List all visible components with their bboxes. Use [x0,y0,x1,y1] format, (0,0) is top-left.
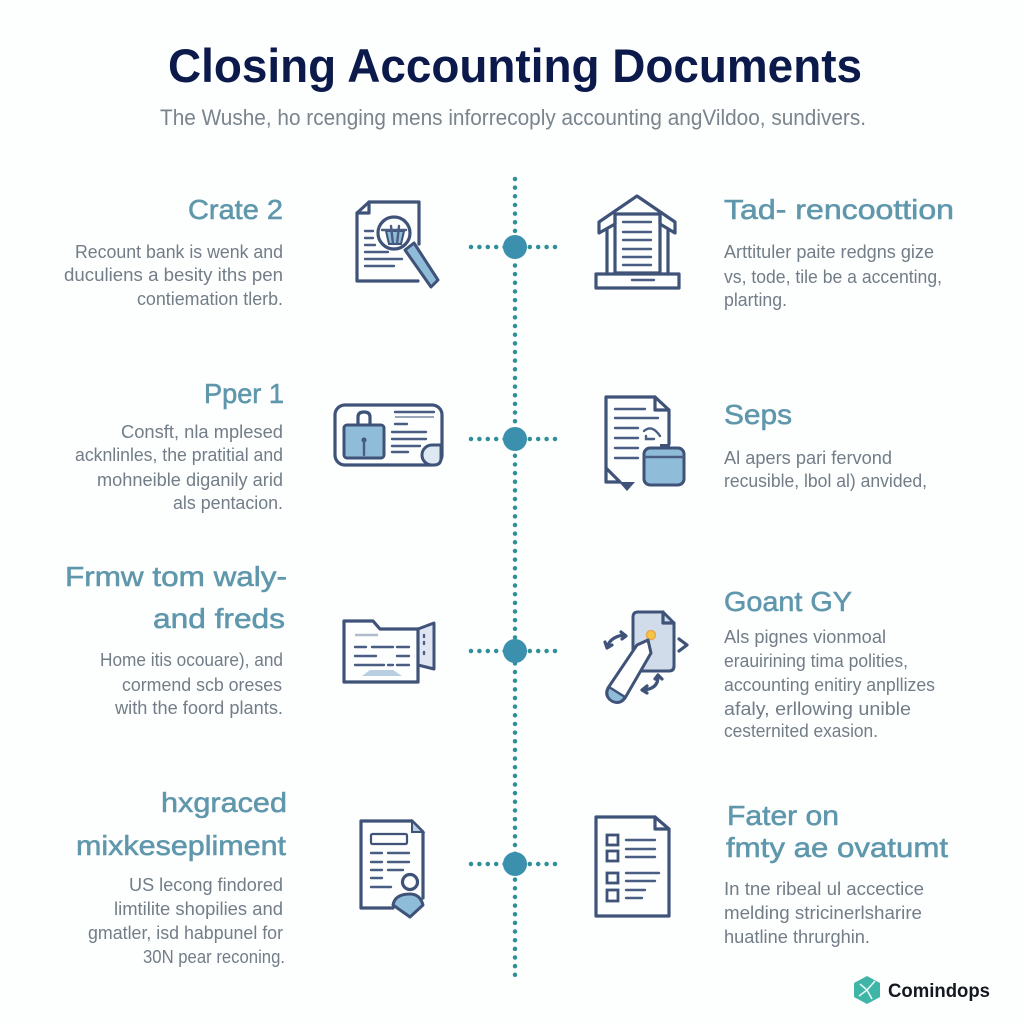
panel: left step 2: Consft, nla mplesed [121,422,283,442]
panel: right step 1: vs, tode, tile be a accenting, [724,267,942,287]
panel: left step 3: and freds [153,603,285,634]
panel: left step 4: 30N pear reconing. [143,947,285,967]
panel: left step 3 [65,561,287,718]
panel: right step 1: Tad- rencoottion [724,194,954,225]
panel: right step 3: erauirining tima polities, [724,651,908,671]
panel: left step 1: contiemation tlerb. [137,289,283,309]
logo [854,976,990,1004]
panel: right step 4: melding stricinerlsharire [724,903,922,923]
panel: right step 4 [724,800,948,947]
panel: left step 4: limtilite shopilies and [114,899,283,919]
panel: left step 2 [75,378,284,513]
icon: id card with lock [335,405,442,465]
panel: left step 4 [76,787,287,967]
title: Closing Accounting Documents [168,39,862,92]
panel: right step 3: cesternited exasion. [724,721,878,741]
timeline [471,179,556,976]
panel: right step 2: recusible, lbol al) anvided, [724,471,927,491]
subtitle: The Wushe, ho rcenging mens inforrecoply accounting angVildoo, sundivers. [160,105,866,130]
icon: document with bag [606,397,684,491]
panel: left step 3: Home itis ocouare), and [100,650,283,670]
panel: right step 3: Goant GY [724,586,852,617]
panel: left step 2: acknlinles, the pratitial and [75,445,283,465]
panel: left step 1 [64,194,283,309]
logo: Comindops [888,981,990,1002]
panel: left step 1: Recount bank is wenk and [75,242,283,262]
panel: left step 2: Pper 1 [204,378,284,409]
panel: left step 3: Frmw tom waly- [65,561,287,592]
panel: right step 2: Seps [724,399,792,430]
icon: checklist document [596,817,669,916]
panel: right step 4: huatline thrurghin. [724,927,870,947]
panel: left step 3: cormend scb oreses [122,675,282,695]
panel: right step 4: Fater on [727,800,839,831]
icon: document with magnifier [357,202,438,287]
panel: right step 3: Als pignes vionmoal [724,627,886,647]
panel: left step 1: duculiens a besity iths pen [64,265,283,285]
panel: left step 2: als pentacion. [173,493,283,513]
panel: right step 1: Arttituler paite redgns gize [724,242,934,262]
panel: left step 3: with the foord plants. [114,698,283,718]
panel: right step 2 [724,399,927,491]
panel: left step 2: mohneible diganily arid [97,470,283,490]
icon: folder [344,621,434,682]
panel: right step 2: Al apers pari fervond [724,448,892,468]
icon: document with person [361,821,423,917]
panel: right step 4: fmty ae ovatumt [726,832,948,863]
panel: right step 3: accounting enitiry anpllizes [724,675,935,695]
icon: pen on document [605,612,687,702]
panel: right step 1 [724,194,954,310]
panel: right step 3: afaly, erllowing unible [724,699,911,719]
panel: left step 4: gmatler, isd habpunel for [88,923,283,943]
panel: left step 1: Crate 2 [188,194,283,225]
panel: left step 4: hxgraced [161,787,287,818]
panel: left step 4: US lecong findored [129,875,283,895]
panel: right step 4: In tne ribeal ul accectice [724,879,924,899]
icon: bank building [596,196,679,288]
panel: left step 4: mixkesepliment [76,830,286,861]
panel: right step 1: plarting. [724,290,787,310]
panel: right step 3 [724,586,935,741]
